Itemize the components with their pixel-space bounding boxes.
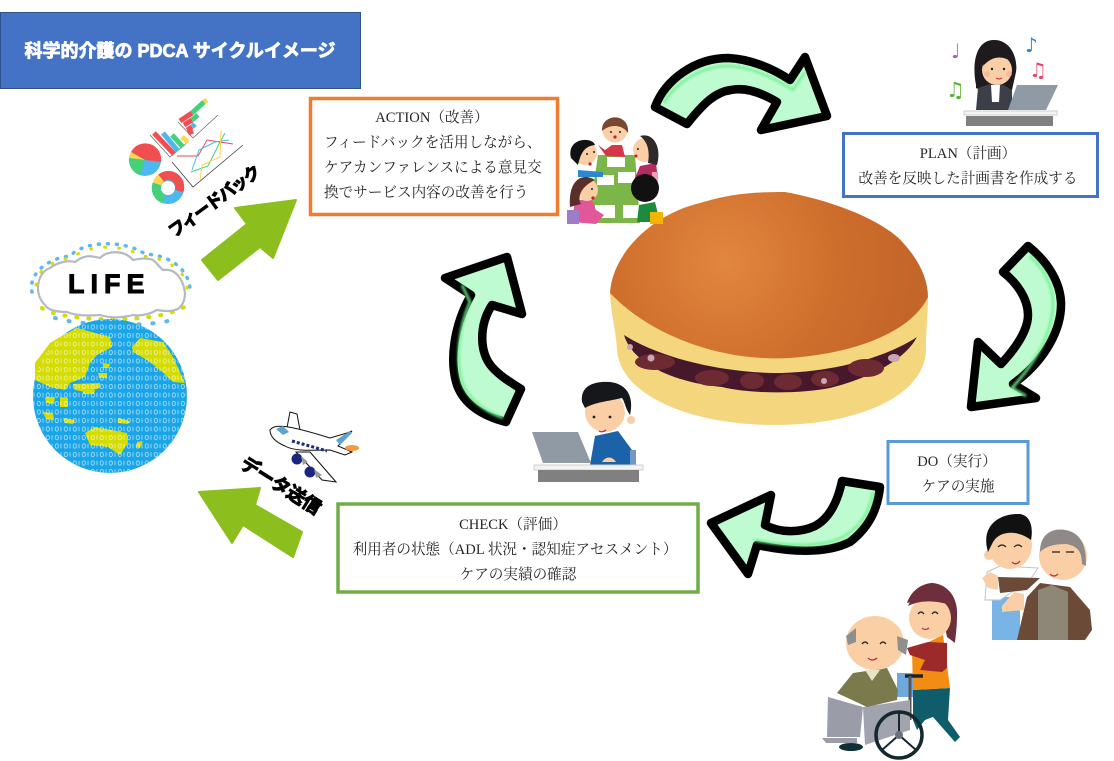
label: feedback: フィードバック — [165, 162, 264, 241]
label: data transfer: データ送信 — [237, 453, 325, 518]
panel: DO: ケアの実施 — [922, 477, 995, 495]
icon: woman at laptop: ♩ — [951, 39, 960, 63]
icon: wheelchair and caregiver — [822, 583, 960, 758]
arrow: do to check — [711, 481, 880, 574]
icon: woman at laptop: ♫ — [946, 78, 965, 102]
arrow: feedback — [202, 200, 296, 280]
icon: woman at laptop: ♪ — [1025, 33, 1038, 57]
panel: ACTION: ACTION（改善） — [375, 109, 489, 126]
icon: man at laptop — [532, 382, 643, 482]
panel: ACTION: フィードバックを活用しながら、 — [324, 134, 541, 151]
panel: CHECK: CHECK（評価） — [459, 516, 567, 533]
icon: dorayaki — [610, 192, 928, 425]
arrow: action to plan — [655, 57, 827, 130]
panel: DO — [888, 442, 1028, 504]
panel: ACTION — [310, 98, 558, 214]
title — [0, 12, 360, 88]
title: 科学的介護の PDCA サイクルイメージ — [24, 40, 336, 61]
panel: PLAN: PLAN（計画） — [920, 145, 1016, 162]
icon: LIFE cloud — [32, 244, 190, 325]
icon: globe — [33, 319, 187, 473]
panel: PLAN: 改善を反映した計画書を作成する — [859, 170, 1077, 187]
arrow: plan to do — [971, 246, 1061, 407]
icon: woman at laptop: ♫ — [1029, 58, 1047, 82]
panel: PLAN — [844, 134, 1098, 196]
panel: DO: DO（実行） — [917, 452, 997, 470]
panel: CHECK: ケアの実績の確認 — [460, 565, 578, 583]
panel: CHECK: 利用者の状態（ADL 状況・認知症アセスメント） — [353, 540, 677, 558]
arrow: data transfer — [199, 488, 302, 557]
icon: LIFE cloud: LIFE — [68, 269, 150, 299]
arrow: check to action — [445, 257, 522, 422]
icon: nurse and elderly man — [982, 514, 1092, 640]
panel: ACTION: ケアカンファレンスによる意見交 — [324, 158, 542, 176]
icon: airplane — [270, 412, 359, 482]
icon: woman at laptop — [946, 33, 1058, 126]
icon: meeting group — [567, 117, 663, 224]
panel: ACTION: 換でサービス内容の改善を行う — [324, 183, 528, 201]
icon: charts — [129, 100, 243, 200]
panel: CHECK — [338, 504, 698, 592]
